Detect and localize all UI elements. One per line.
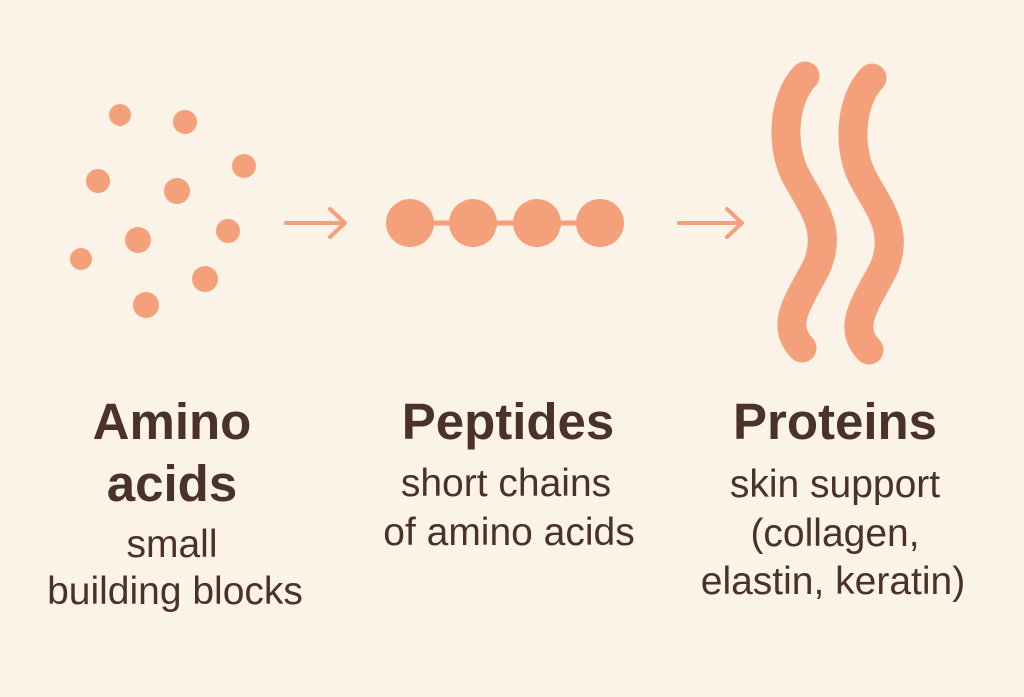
text: peptides: short chains: [401, 462, 611, 505]
text: proteins: Proteins: [733, 393, 937, 450]
text: proteins: (collagen,: [750, 512, 920, 555]
text: proteins: skin support: [730, 463, 940, 506]
icon: peptide chain: [386, 199, 624, 247]
icon: protein waves: [786, 76, 889, 350]
text: amino acids: [47, 393, 303, 613]
arrow 1: [286, 209, 345, 237]
text: peptides: of amino acids: [383, 511, 635, 554]
text: proteins: [701, 393, 965, 603]
arrow 2: [679, 209, 742, 237]
text: proteins: elastin, keratin): [701, 560, 965, 603]
text: amino acids: Amino: [93, 393, 251, 450]
text: peptides: [383, 393, 635, 554]
text: amino acids: building blocks: [47, 570, 303, 613]
text: peptides: Peptides: [402, 393, 614, 450]
icon: scattered amino acid dots: [70, 104, 256, 318]
text: amino acids: small: [126, 523, 218, 566]
text: amino acids: acids: [107, 455, 237, 512]
